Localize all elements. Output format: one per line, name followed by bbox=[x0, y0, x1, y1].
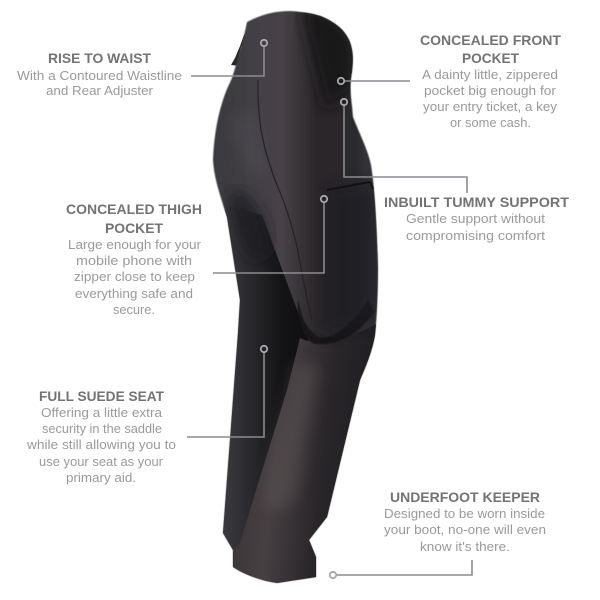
hip shadow bbox=[325, 180, 380, 335]
breeches silhouette bbox=[213, 11, 378, 583]
text: underfoot keeper bbox=[384, 489, 546, 554]
front lower leg bbox=[233, 324, 376, 583]
text: concealed thigh pocket: CONCEALED THIGH bbox=[66, 201, 202, 217]
text: concealed thigh pocket: secure. bbox=[113, 303, 155, 317]
text: rise to waist: With a Contoured Waistline bbox=[17, 69, 182, 83]
text: concealed thigh pocket: Large enough for your bbox=[68, 238, 201, 252]
leader: underfoot keeper bbox=[330, 560, 472, 578]
knee folds bbox=[298, 300, 374, 344]
text: full suede seat bbox=[26, 388, 176, 485]
text: concealed front pocket: or some cash. bbox=[450, 116, 531, 130]
text: concealed thigh pocket: POCKET bbox=[105, 220, 163, 236]
text: underfoot keeper: your boot, no-one will even bbox=[384, 523, 546, 537]
text: underfoot keeper: know it's there. bbox=[420, 540, 510, 554]
leader: inbuilt tummy support bbox=[341, 99, 467, 193]
text: inbuilt tummy support: INBUILT TUMMY SUPPORT bbox=[384, 194, 569, 210]
text: full suede seat: while still allowing you to bbox=[26, 438, 176, 452]
text: concealed thigh pocket: everything safe and bbox=[75, 287, 193, 301]
text: rise to waist bbox=[17, 50, 182, 98]
text: concealed thigh pocket bbox=[66, 201, 202, 317]
text: concealed front pocket: POCKET bbox=[462, 50, 519, 66]
thigh pocket zipper bbox=[327, 182, 373, 190]
text: rise to waist: and Rear Adjuster bbox=[46, 84, 153, 98]
text: concealed thigh pocket: mobile phone with bbox=[76, 254, 192, 268]
text: concealed front pocket: A dainty little, zippered bbox=[422, 68, 558, 82]
text: concealed front pocket: CONCEALED FRONT bbox=[420, 32, 561, 48]
text: inbuilt tummy support: compromising comfort bbox=[406, 229, 546, 243]
text: full suede seat: use your seat as your bbox=[39, 455, 163, 469]
text: concealed front pocket: pocket big enough for bbox=[424, 84, 556, 98]
text: rise to waist: RISE TO WAIST bbox=[48, 50, 151, 66]
text: inbuilt tummy support: Gentle support without bbox=[406, 212, 546, 226]
rear leg bbox=[223, 208, 308, 550]
text: full suede seat: security in the saddle bbox=[42, 422, 162, 436]
text: concealed front pocket bbox=[420, 32, 561, 130]
text: inbuilt tummy support bbox=[384, 194, 569, 243]
leader: concealed front pocket bbox=[338, 78, 410, 84]
photo: riding breeches side view bbox=[213, 5, 380, 590]
rear adjuster buckle bbox=[231, 30, 252, 66]
shin highlight bbox=[269, 366, 318, 506]
text: full suede seat: FULL SUEDE SEAT bbox=[39, 388, 164, 404]
text: underfoot keeper: Designed to be worn inside bbox=[384, 507, 545, 521]
text: full suede seat: primary aid. bbox=[66, 471, 136, 485]
text: concealed thigh pocket: zipper close to keep bbox=[74, 270, 195, 284]
leader: rise to waist bbox=[191, 40, 267, 76]
seat highlight bbox=[228, 110, 270, 175]
text: concealed front pocket: your entry ticket, a key bbox=[423, 100, 558, 114]
under-seat shadow bbox=[228, 191, 272, 260]
text: full suede seat: Offering a little extra bbox=[41, 406, 162, 420]
side seam bbox=[258, 80, 312, 320]
waistband shadow bbox=[300, 5, 355, 110]
leader: full suede seat bbox=[187, 346, 267, 437]
leader: concealed thigh pocket bbox=[213, 196, 327, 273]
text: underfoot keeper: UNDERFOOT KEEPER bbox=[390, 489, 540, 505]
